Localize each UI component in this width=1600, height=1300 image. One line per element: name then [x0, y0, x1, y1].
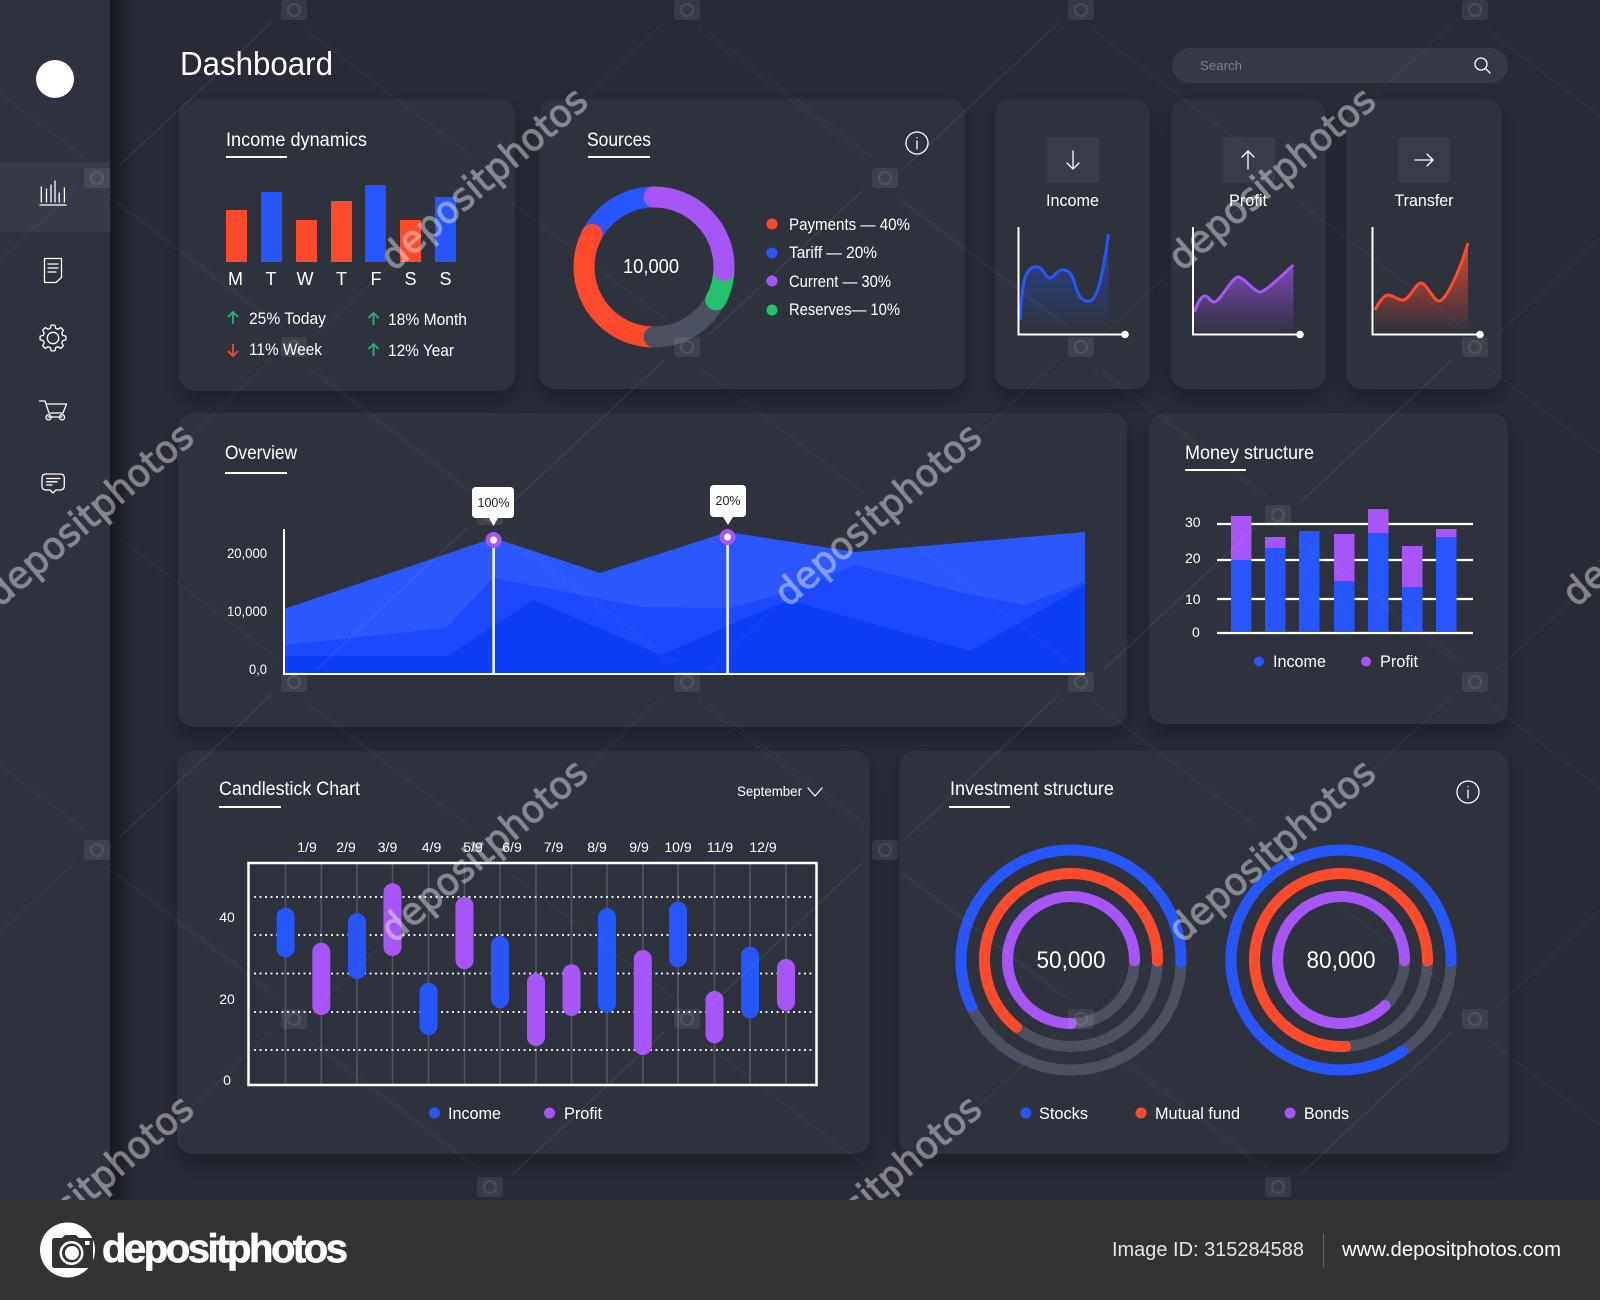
stock preview overlay marks: depositphotos	[1160, 751, 1384, 951]
panel: income card	[995, 99, 1150, 389]
ring legend: Stocks	[1039, 1104, 1088, 1123]
y axis labels	[227, 545, 267, 677]
search bar	[1172, 48, 1508, 83]
mini area chart: profit	[1193, 227, 1304, 338]
y axis labels: 40	[219, 909, 235, 925]
stacked bar chart: 0	[1192, 624, 1200, 640]
icon: info	[1457, 781, 1479, 803]
panel: income dynamics: Income dynamics	[226, 130, 367, 151]
weekly bar chart: F	[370, 269, 382, 289]
date labels: 2/9	[336, 839, 356, 855]
date labels	[297, 839, 777, 855]
tooltip: 20%: 20%	[716, 493, 741, 508]
candlestick legend: Profit	[564, 1104, 602, 1123]
candlestick legend	[429, 1104, 602, 1123]
avatar circle	[36, 60, 74, 98]
ring chart: 80,000: 80,000	[1306, 947, 1376, 974]
statistics list	[228, 309, 467, 360]
mini area chart: transfer	[1372, 227, 1484, 338]
icon: info	[906, 132, 928, 154]
ring legend: Mutual fund	[1155, 1104, 1240, 1123]
y axis labels	[219, 909, 235, 1088]
donut legend: Payments — 40%	[789, 215, 910, 234]
footer logo	[40, 1222, 348, 1278]
weekly bar chart: S	[404, 269, 417, 289]
footer logo: depositphotos	[102, 1227, 348, 1271]
stacked bar chart: 20	[1185, 550, 1201, 566]
date labels: 11/9	[707, 839, 733, 855]
date labels: 7/9	[544, 839, 563, 855]
bar legend: Income	[1273, 652, 1326, 671]
y axis labels: 10,000	[227, 603, 267, 619]
panel: overview: Overview	[225, 443, 297, 464]
weekly bar chart: S	[439, 269, 452, 289]
icon: shopping cart	[40, 401, 66, 420]
stock preview overlay marks: depositphotos	[372, 79, 596, 279]
weekly bar chart: T	[336, 269, 347, 289]
panel: profit card	[1171, 99, 1326, 389]
icon: bar chart	[40, 181, 66, 205]
stock preview overlay marks: depositphotos	[766, 415, 990, 615]
panel: investment structure	[899, 751, 1509, 1154]
panel: candlestick chart	[177, 751, 870, 1154]
ring chart: 50,000	[925, 814, 1217, 1106]
date labels: 9/9	[629, 839, 649, 855]
title: Dashboard	[180, 45, 333, 82]
bar legend: Profit	[1380, 652, 1418, 671]
weekly bar chart: M	[228, 269, 243, 289]
panel: income dynamics	[179, 99, 515, 391]
date labels: 6/9	[502, 839, 522, 855]
ring chart: 50,000: 50,000	[1036, 947, 1106, 974]
y axis labels: 0	[223, 1072, 231, 1088]
panel: transfer card: Transfer	[1394, 191, 1454, 210]
date labels: 5/9	[463, 839, 483, 855]
icon: document	[44, 258, 62, 282]
date labels: 1/9	[297, 839, 317, 855]
panel: sources: Sources	[587, 130, 651, 151]
panel: sources	[539, 99, 965, 389]
donut legend: Reserves— 10%	[789, 300, 900, 319]
month selector: September	[737, 783, 802, 799]
tooltip: 100%	[472, 487, 514, 526]
candlestick plot	[248, 863, 816, 1085]
weekly bar chart: W	[296, 269, 314, 289]
stacked bar chart	[1185, 509, 1473, 640]
statistics list: 25% Today	[249, 309, 326, 328]
ring legend	[1020, 1104, 1349, 1123]
panel: income card: Income	[1046, 191, 1099, 210]
sidebar	[0, 0, 137, 1200]
date labels: 10/9	[664, 839, 692, 855]
y axis labels: 0,0	[249, 661, 267, 677]
website: www.depositphotos.com	[1341, 1239, 1561, 1261]
ring chart: 80,000	[1188, 807, 1494, 1113]
icon: down arrow	[1047, 137, 1099, 183]
panel: profit card: Profit	[1229, 191, 1267, 210]
panel: sources: 10,000	[623, 256, 679, 278]
panel: candlestick chart: Candlestick Chart	[219, 779, 361, 800]
footer bar	[0, 1200, 1600, 1300]
stock preview overlay marks: depositphotos	[766, 1087, 990, 1287]
date labels: 4/9	[422, 839, 441, 855]
icon: magnifier	[1475, 58, 1490, 73]
donut legend: Tariff — 20%	[789, 243, 877, 262]
icon: right arrow	[1398, 137, 1450, 183]
panel: investment structure: Investment structure	[950, 779, 1114, 800]
donut legend: Current — 30%	[789, 272, 891, 291]
stacked bar chart: 30	[1185, 514, 1201, 530]
stacked bar chart: 10	[1185, 591, 1201, 607]
icon: gear	[40, 325, 66, 351]
panel: transfer card	[1346, 99, 1502, 389]
layered area chart	[284, 529, 1085, 674]
mini area chart: income	[1018, 227, 1129, 338]
statistics list: 12% Year	[388, 341, 454, 360]
stock preview overlay marks: depositphotos	[1160, 79, 1384, 279]
panel: money structure	[1149, 413, 1508, 724]
image id: Image ID: 315284588	[1112, 1239, 1304, 1261]
icon: up arrow	[1223, 137, 1275, 183]
bar legend	[1254, 652, 1418, 671]
weekly bar chart	[226, 185, 456, 289]
weekly bar chart: T	[266, 269, 276, 289]
date labels: 8/9	[587, 839, 607, 855]
y axis labels: 20,000	[227, 545, 267, 561]
search bar: Search	[1200, 58, 1242, 73]
candlestick legend: Income	[448, 1104, 501, 1123]
stock preview overlay marks: depositphotos	[372, 751, 596, 951]
active nav highlight	[0, 162, 110, 232]
statistics list: 11% Week	[249, 340, 322, 359]
y axis labels: 20	[219, 991, 235, 1007]
date labels: 12/9	[749, 839, 777, 855]
donut legend	[766, 215, 910, 319]
panel: money structure: Money structure	[1185, 443, 1314, 464]
date labels: 3/9	[378, 839, 397, 855]
donut chart	[559, 172, 749, 362]
tooltip: 100%: 100%	[478, 495, 510, 510]
icon: chat bubble	[42, 474, 64, 493]
tooltip: 20%	[710, 485, 746, 525]
ring legend: Bonds	[1304, 1104, 1349, 1123]
statistics list: 18% Month	[388, 310, 467, 329]
panel: overview	[178, 413, 1127, 727]
